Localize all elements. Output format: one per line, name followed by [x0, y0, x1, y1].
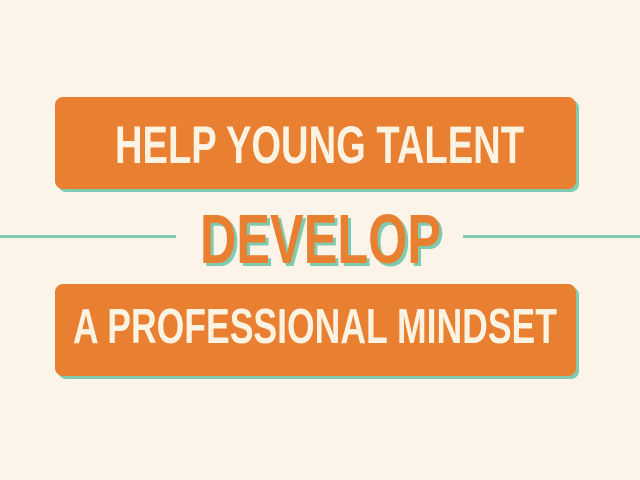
divider line right	[463, 235, 640, 238]
panel: top banner	[55, 97, 579, 192]
divider line left	[0, 235, 176, 238]
heading: develop: DEVELOP	[203, 203, 444, 281]
panel: bottom banner	[55, 284, 579, 379]
heading: develop: DEVELOP	[200, 200, 441, 278]
